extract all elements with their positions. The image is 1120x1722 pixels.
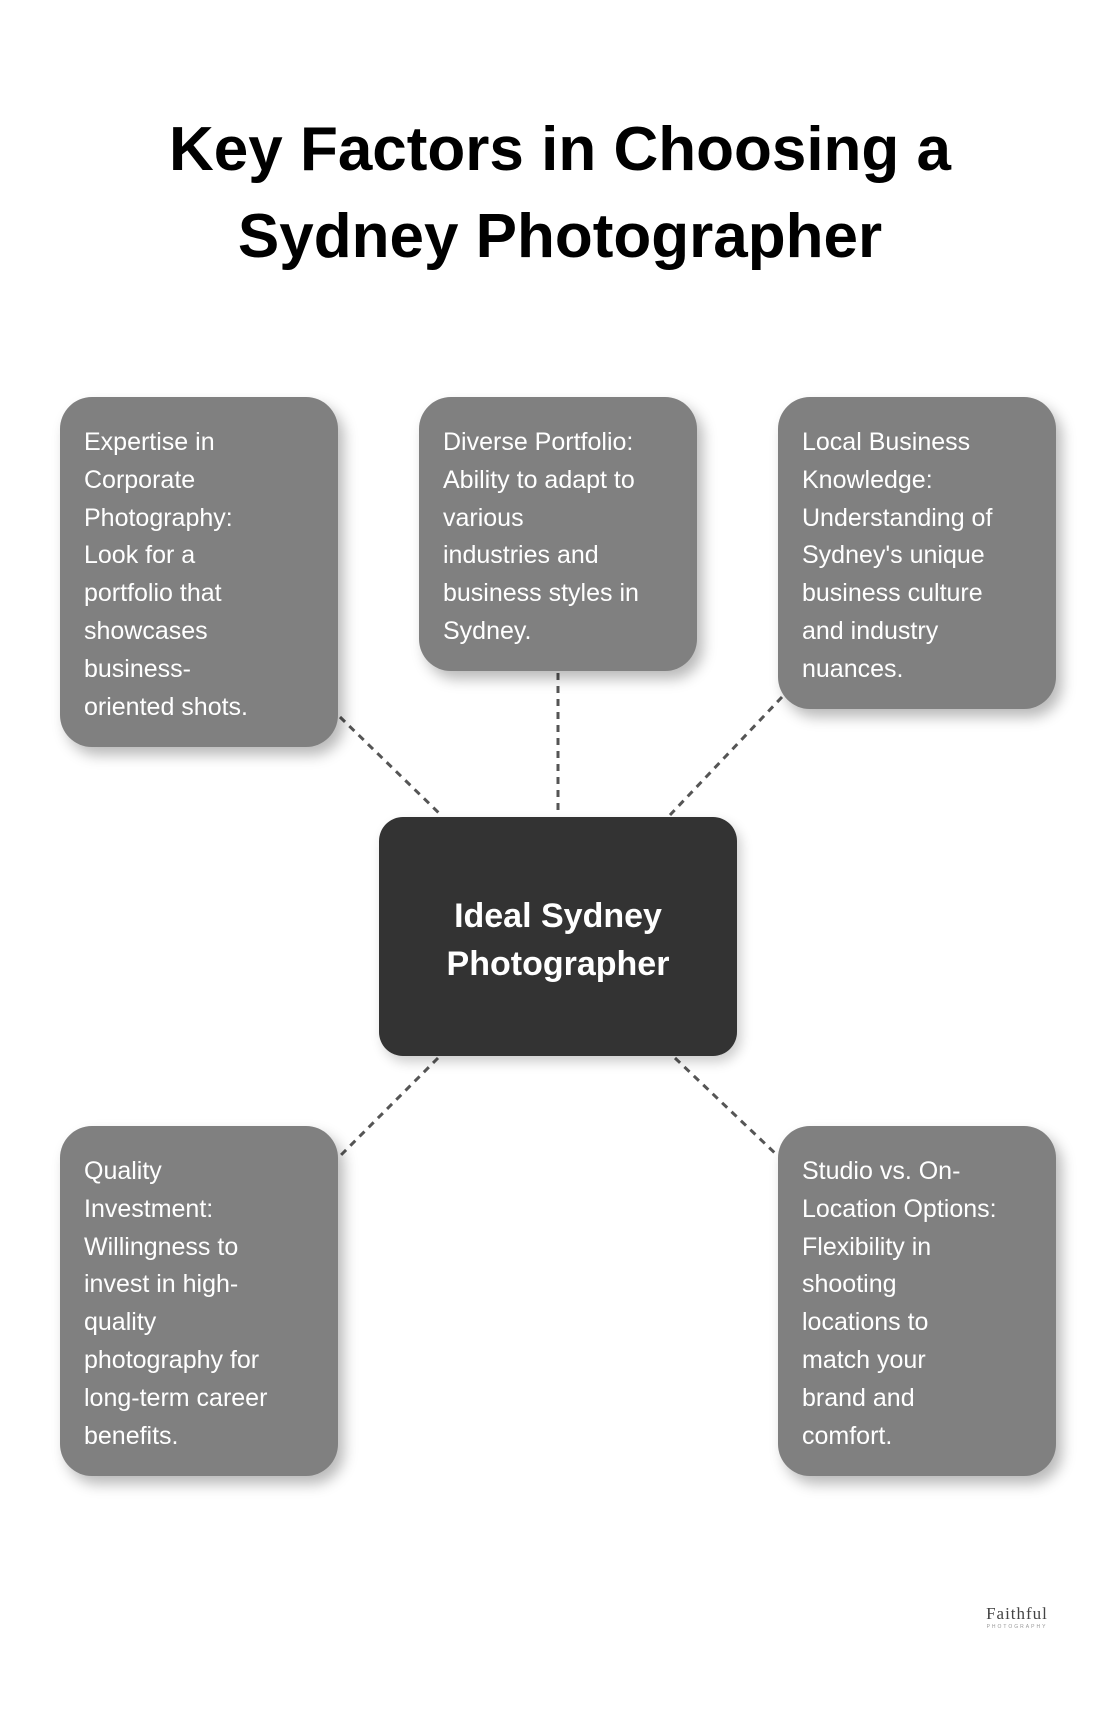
box: studio vs location: brand and xyxy=(802,1384,915,1412)
box: expertise: Look for a xyxy=(84,541,195,569)
box: local knowledge: nuances. xyxy=(802,655,903,683)
box: diverse portfolio xyxy=(419,397,697,671)
box: diverse portfolio: Diverse Portfolio: xyxy=(443,428,633,456)
box: diverse portfolio: various xyxy=(443,504,524,532)
logo: PHOTOGRAPHY xyxy=(987,1624,1047,1630)
box: expertise: Photography: xyxy=(84,504,233,532)
box: expertise: Expertise in xyxy=(84,428,215,456)
box: local knowledge: Local Business xyxy=(802,428,970,456)
box: local knowledge: and industry xyxy=(802,617,938,645)
box: quality investment: benefits. xyxy=(84,1422,179,1450)
box: quality investment xyxy=(60,1126,338,1476)
box: quality investment: Willingness to xyxy=(84,1233,238,1261)
logo: Faithful xyxy=(986,1604,1048,1623)
box: local knowledge: Understanding of xyxy=(802,504,992,532)
title: Key Factors in Choosing a xyxy=(169,115,951,184)
box: studio vs location xyxy=(778,1126,1056,1476)
box: diverse portfolio: Ability to adapt to xyxy=(443,466,635,494)
center node: Photographer xyxy=(447,944,669,982)
box: studio vs location: shooting xyxy=(802,1270,897,1298)
title: Sydney Photographer xyxy=(238,202,882,271)
box: studio vs location: Flexibility in xyxy=(802,1233,931,1261)
box: expertise xyxy=(60,397,338,747)
box: quality investment: Investment: xyxy=(84,1195,213,1223)
box: diverse portfolio: Sydney. xyxy=(443,617,531,645)
box: local knowledge: Sydney's unique xyxy=(802,541,985,569)
box: studio vs location: locations to xyxy=(802,1308,928,1336)
box: expertise: showcases xyxy=(84,617,208,645)
box: quality investment: long-term career xyxy=(84,1384,267,1412)
title xyxy=(169,115,952,271)
box: studio vs location: Location Options: xyxy=(802,1195,997,1223)
box: quality investment: quality xyxy=(84,1308,156,1336)
box: expertise: Corporate xyxy=(84,466,195,494)
box: diverse portfolio: business styles in xyxy=(443,579,639,607)
center node xyxy=(379,817,737,1056)
box: local knowledge xyxy=(778,397,1056,709)
box: quality investment: invest in high- xyxy=(84,1270,238,1298)
box: studio vs location: comfort. xyxy=(802,1422,892,1450)
box: expertise: business- xyxy=(84,655,191,683)
box: expertise: oriented shots. xyxy=(84,693,248,721)
box: quality investment: Quality xyxy=(84,1157,162,1185)
box: local knowledge: Knowledge: xyxy=(802,466,933,494)
box: diverse portfolio: industries and xyxy=(443,541,599,569)
box: local knowledge: business culture xyxy=(802,579,983,607)
box: quality investment: photography for xyxy=(84,1346,259,1374)
box: studio vs location: Studio vs. On- xyxy=(802,1157,960,1185)
box: expertise: portfolio that xyxy=(84,579,222,607)
box: studio vs location: match your xyxy=(802,1346,926,1374)
center node: Ideal Sydney xyxy=(454,896,662,934)
